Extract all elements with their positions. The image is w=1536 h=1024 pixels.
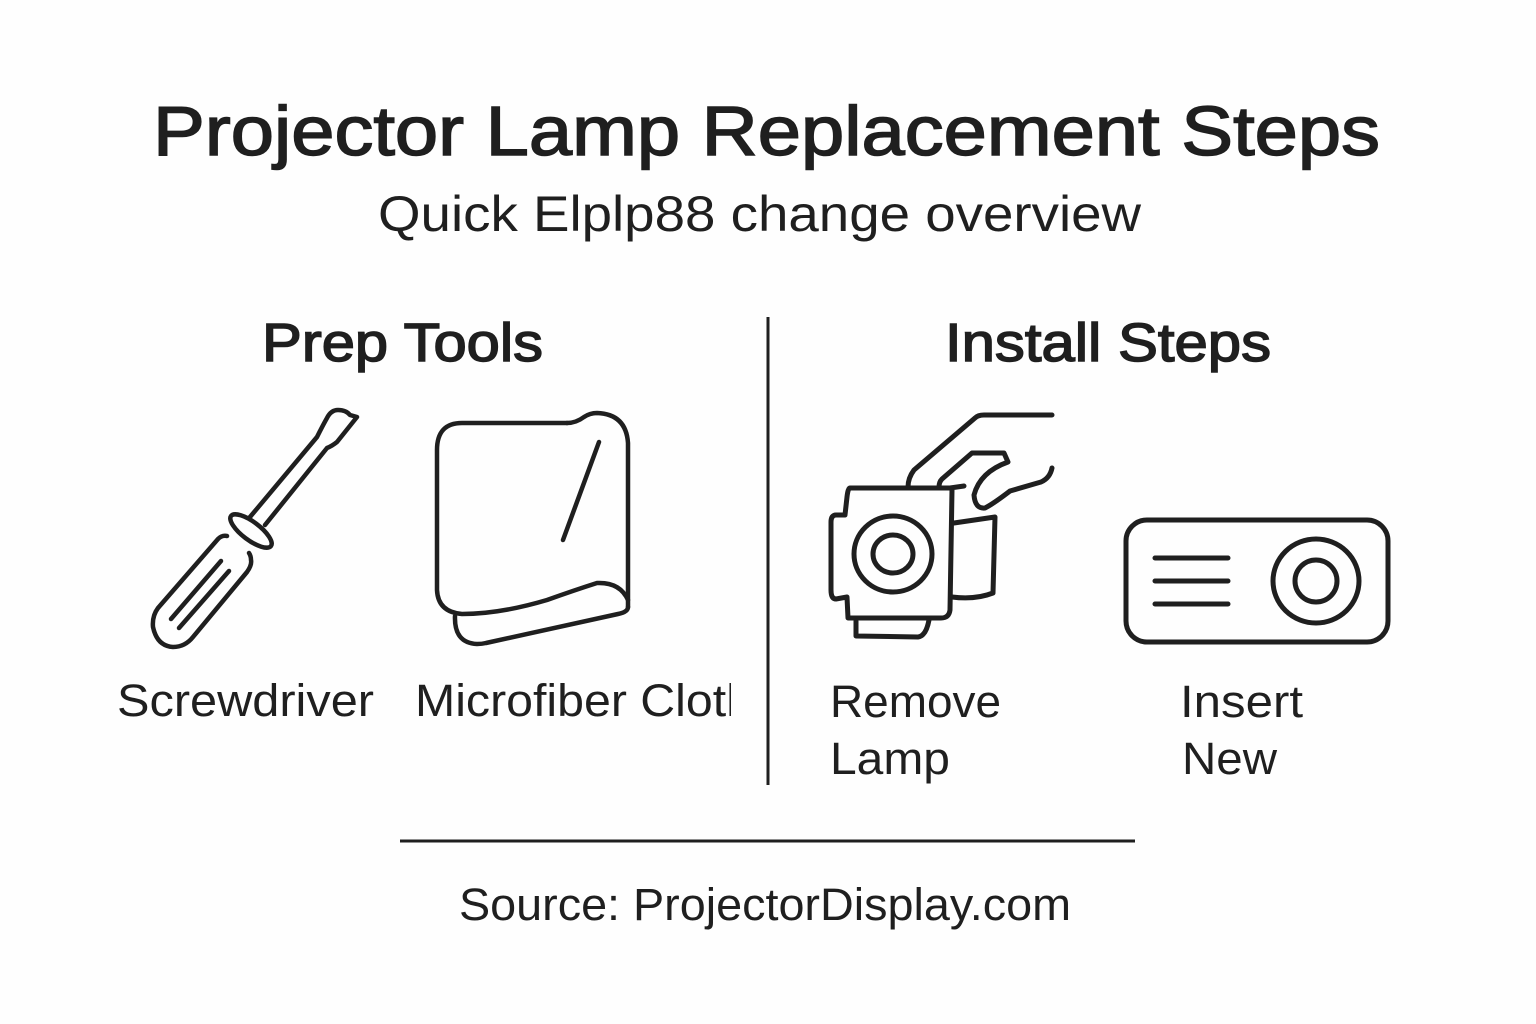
icon: removing lamp by hand [831, 415, 1052, 637]
divider: horizontal [400, 840, 1135, 842]
label: screwdriver: Screwdriver [117, 675, 374, 726]
heading: install steps: Install Steps [945, 313, 1271, 373]
title: Projector Lamp Replacement Steps [153, 92, 1380, 170]
divider: vertical [766, 317, 770, 785]
label: remove lamp: Remove [830, 676, 1001, 727]
label: insert new: Insert [1180, 676, 1304, 727]
icon: microfiber cloth [437, 413, 628, 644]
subtitle: Quick Elplp88 change overview [378, 186, 1142, 242]
panel: install steps [830, 313, 1388, 784]
icon: screwdriver [153, 410, 357, 647]
heading: prep tools: Prep Tools [262, 313, 543, 373]
panel: prep tools [117, 313, 753, 726]
label: insert new: New [1182, 733, 1278, 784]
source: Source: ProjectorDisplay.com [459, 879, 1071, 930]
label: remove lamp: Lamp [830, 733, 950, 784]
icon: projector [1126, 520, 1388, 642]
label: microfiber cloth: Microfiber Cloth [415, 675, 753, 726]
